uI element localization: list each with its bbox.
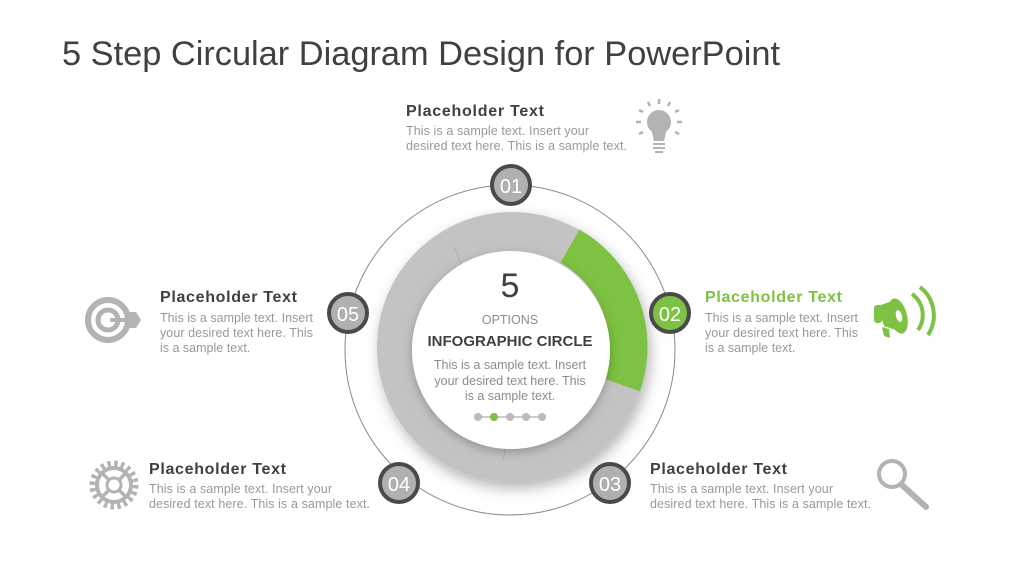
text block 05 [160, 289, 314, 355]
badge 05: 05 [337, 304, 359, 326]
icon: light bulb [636, 99, 682, 153]
text block 01: This is a sample text. Insert your [406, 124, 589, 138]
text block 03: Placeholder Text [650, 461, 788, 478]
badge 03: 03 [599, 474, 621, 496]
badge 03 [591, 464, 629, 502]
center circle: INFOGRAPHIC CIRCLE [428, 333, 592, 350]
text block 04 [149, 461, 370, 511]
text block 02 [705, 289, 859, 355]
icon: gear [93, 464, 135, 506]
badge 04 [380, 464, 418, 502]
badge 04: 04 [388, 474, 410, 496]
icon: magnifier [879, 461, 926, 507]
badge 01 [492, 166, 530, 204]
text block 05: Placeholder Text [160, 289, 298, 306]
icon: megaphone [874, 287, 934, 338]
badge 05 [329, 294, 367, 332]
text block 02: Placeholder Text [705, 289, 843, 306]
text block 01 [406, 103, 627, 153]
text block 04: This is a sample text. Insert your [149, 482, 332, 496]
text block 03 [650, 461, 871, 511]
badge 01: 01 [500, 176, 522, 198]
green segment [570, 246, 628, 385]
badge 02: 02 [659, 304, 681, 326]
text block 01: Placeholder Text [406, 103, 545, 120]
text block 04: desired text here. This is a sample text. [149, 497, 370, 511]
center circle: is a sample text. [465, 389, 555, 403]
text block 04: Placeholder Text [149, 461, 287, 478]
text block 05: This is a sample text. Insert [160, 311, 314, 325]
text block 05: your desired text here. This [160, 326, 313, 340]
center circle [412, 251, 610, 449]
outer thin circle [345, 185, 675, 515]
center circle: OPTIONS [482, 313, 538, 327]
center circle: your desired text here. This [434, 374, 586, 388]
icon: target [88, 300, 141, 340]
donut ring [396, 231, 628, 463]
text block 02: your desired text here. This [705, 326, 858, 340]
text block 03: This is a sample text. Insert your [650, 482, 833, 496]
text block 02: This is a sample text. Insert [705, 311, 859, 325]
text block 02: is a sample text. [705, 341, 795, 355]
title: 5 Step Circular Diagram Design for PowerPoint [62, 35, 781, 73]
dots [474, 413, 546, 421]
text block 05: is a sample text. [160, 341, 250, 355]
text block 03: desired text here. This is a sample text. [650, 497, 871, 511]
badge 02 [651, 294, 689, 332]
center circle: This is a sample text. Insert [434, 358, 587, 372]
center text: 5 [501, 267, 519, 305]
text block 01: desired text here. This is a sample text. [406, 139, 627, 153]
